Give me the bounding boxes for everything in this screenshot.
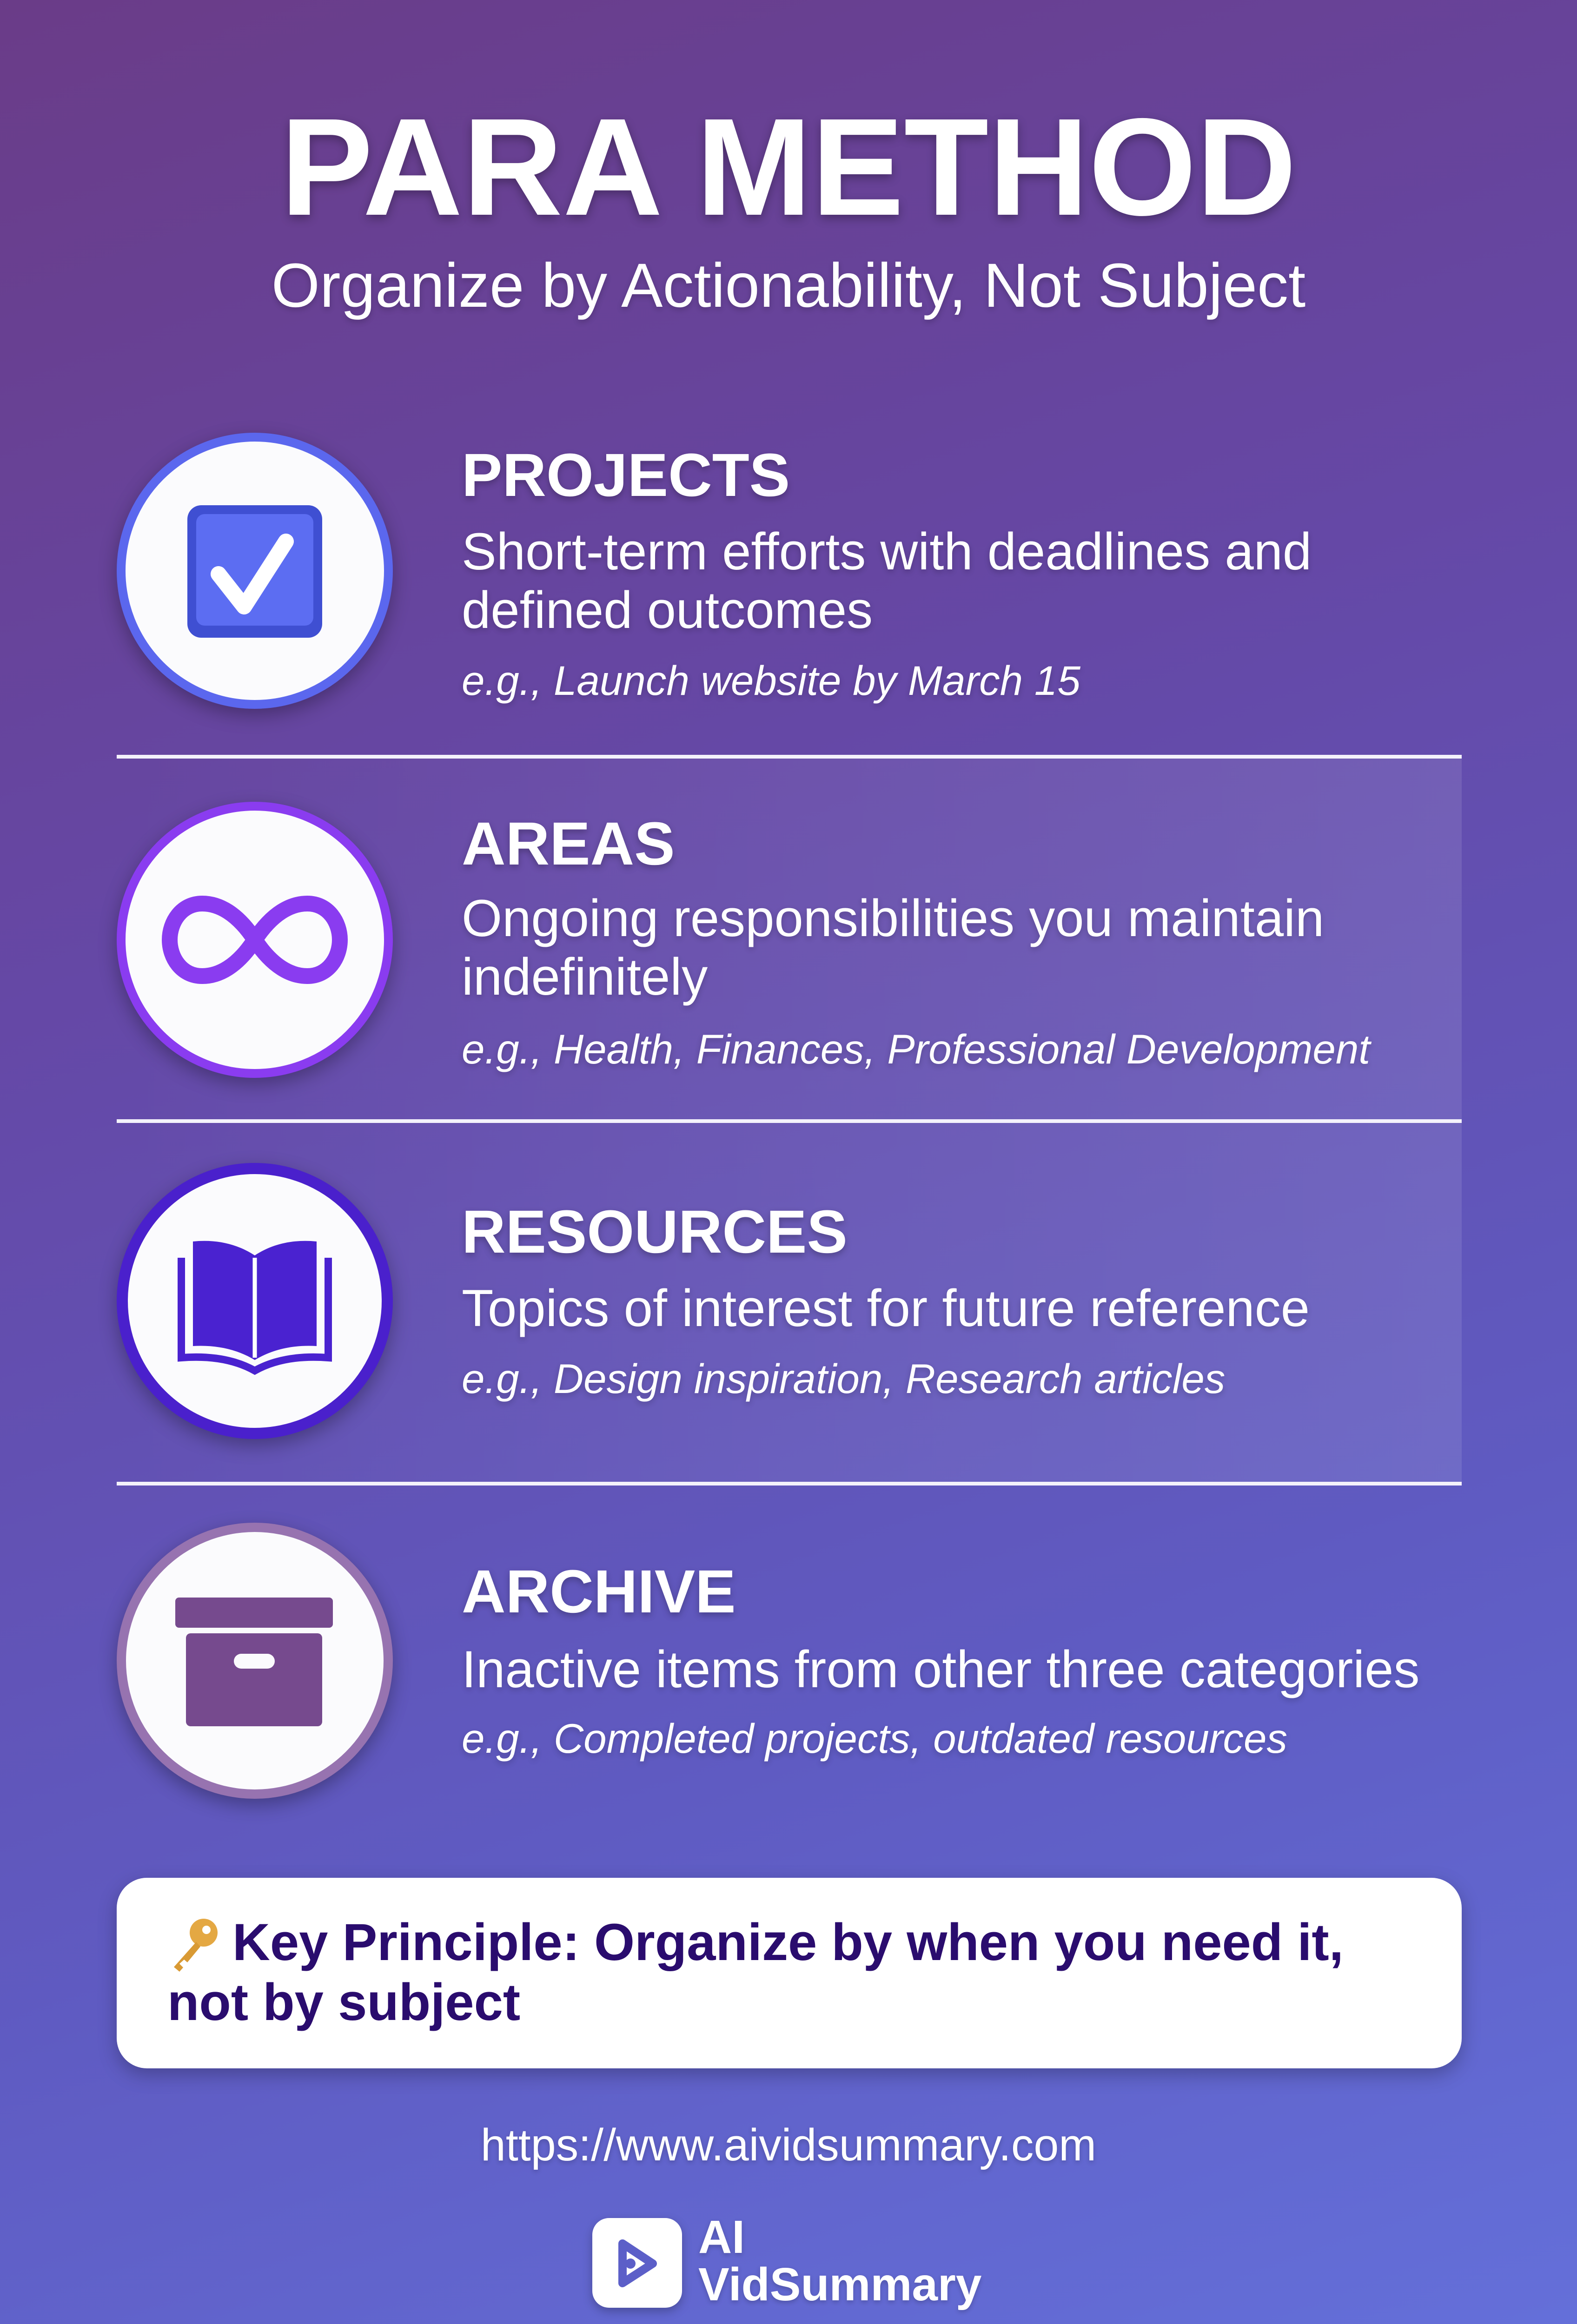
text: projects description: Short-term efforts with deadlines and <box>462 522 1312 581</box>
text: archive description: Inactive items from other three categories <box>462 1640 1419 1698</box>
text: url: https://www.aividsummary.com <box>481 2119 1096 2170</box>
panel: areas and resources highlight <box>117 759 1462 1484</box>
text: key principle: not by subject <box>167 1973 520 2031</box>
text: areas description: indefinitely <box>462 948 708 1006</box>
text: projects example: e.g., Launch website by March 15 <box>462 657 1080 704</box>
icon: archive box <box>117 1523 393 1799</box>
heading: archive: ARCHIVE <box>462 1557 736 1625</box>
text: areas description <box>462 889 1324 1006</box>
text: key principle <box>232 1912 1441 2032</box>
text: archive example: e.g., Completed projects, outdated resources <box>462 1715 1287 1762</box>
text: logo name: VidSummary <box>698 2258 982 2311</box>
text: logo name: AI <box>698 2211 745 2263</box>
icon: key <box>166 1915 221 1975</box>
text: areas example: e.g., Health, Finances, Professional Development <box>462 1026 1370 1072</box>
text: logo name <box>698 2213 982 2308</box>
text: key principle: Key Principle: Organize by when you need it, <box>232 1913 1344 1971</box>
logo <box>592 2218 992 2311</box>
heading: areas: AREAS <box>462 809 675 878</box>
icon: play logo <box>592 2218 682 2308</box>
title: PARA METHOD <box>280 90 1297 244</box>
text: resources description: Topics of interest for future reference <box>462 1279 1310 1337</box>
text: areas description: Ongoing responsibilities you maintain <box>462 889 1324 947</box>
text: resources example: e.g., Design inspiration, Research articles <box>462 1355 1225 1402</box>
icon: projects checkbox <box>117 433 393 709</box>
icon: areas infinity <box>117 802 393 1078</box>
heading: resources: RESOURCES <box>462 1197 848 1266</box>
icon: resources book <box>117 1163 393 1439</box>
subtitle: Organize by Actionability, Not Subject <box>272 251 1305 320</box>
callout: key principle <box>117 1878 1462 2068</box>
heading: projects: PROJECTS <box>462 441 790 509</box>
text: projects description <box>462 522 1312 640</box>
text: projects description: defined outcomes <box>462 581 873 639</box>
